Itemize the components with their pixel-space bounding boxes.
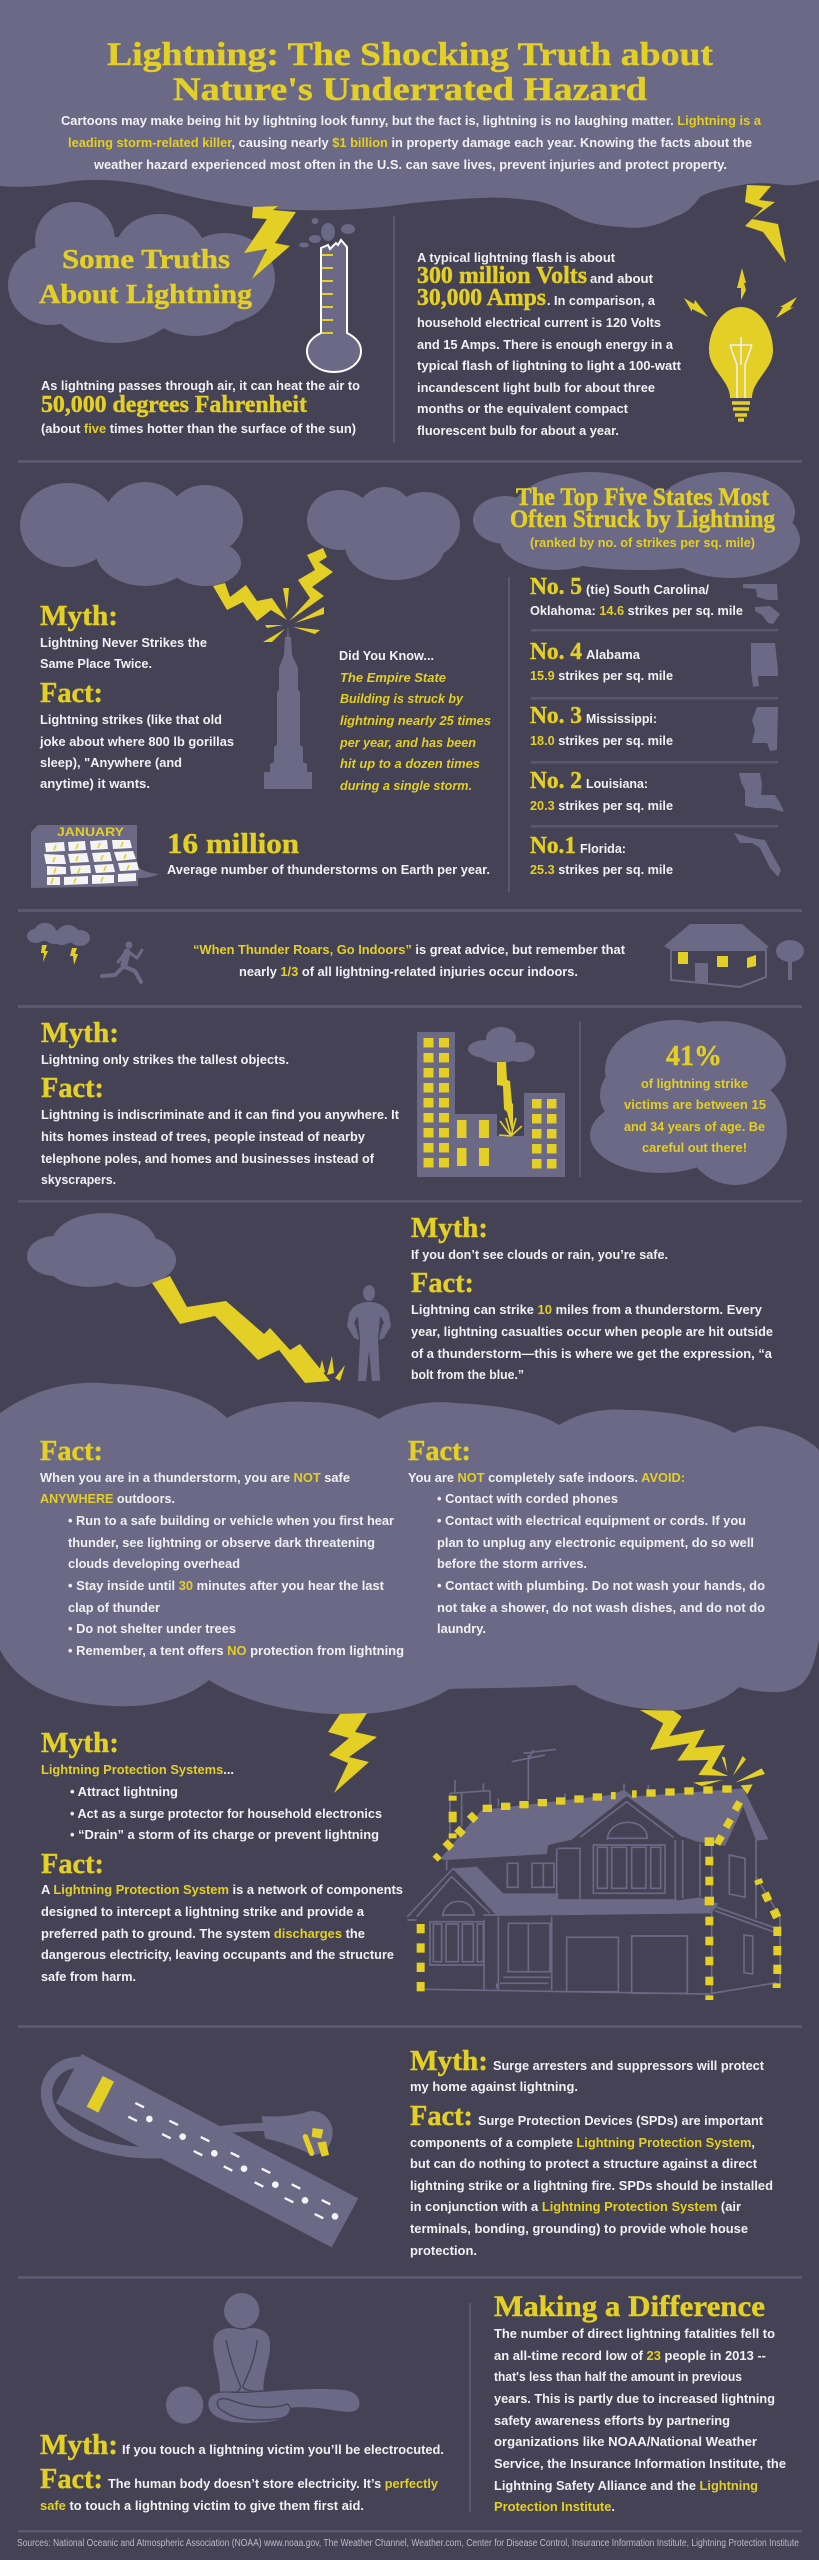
callout: 41 percent: 41%	[666, 1040, 722, 1072]
text: myth and fact: Myth:	[41, 1017, 119, 1049]
text: heat of lightning	[41, 379, 360, 436]
text: myth and fact: dangerous electricity, leaving occupants and the structure	[41, 1948, 394, 1962]
text: volts and amps: . In comparison, a	[547, 294, 656, 308]
heading: some truths: About Lightning	[39, 279, 253, 309]
text: myth and fact	[410, 2045, 773, 2258]
text: myth and fact	[411, 1212, 773, 1382]
rank: no. 3 mississippi	[530, 703, 778, 751]
panel: surge protection myth	[47, 2045, 773, 2258]
text: volts and amps: months or the equivalent compact	[417, 402, 629, 416]
text: myth and fact: of a thunderstorm—this is where we get the expression, “a	[411, 1347, 773, 1361]
panel: making a difference	[494, 2290, 786, 2514]
text: did you know: per year, and has been	[339, 736, 476, 750]
text: indoors fact	[408, 1435, 765, 1636]
text: myth and fact: but can do nothing to protect a structure against a direct	[410, 2157, 758, 2171]
text: myth and fact: year, lightning casualties occur when people are hit outside	[411, 1325, 773, 1339]
text: myth and fact: components of a complete Lightning Protection System ,	[410, 2136, 755, 2150]
text: myth and fact: hits homes instead of trees, people instead of nearby	[41, 1130, 365, 1144]
text: did you know	[339, 649, 491, 793]
text: myth and fact: Lightning Never Strikes the	[40, 636, 207, 650]
text: volts and amps: incandescent light bulb for about three	[417, 381, 655, 395]
protection conductor	[417, 1784, 781, 2000]
text: myth and fact: Myth:	[410, 2045, 488, 2077]
text: making a difference body: organizations like NOAA/National Weather	[494, 2435, 757, 2449]
text: when thunder roars go indoors	[193, 943, 626, 979]
panel: safety facts cloud	[0, 1383, 819, 1714]
rank: no. 3 mississippi: No. 3	[530, 703, 582, 729]
cloud: some truths	[8, 202, 275, 343]
text: myth and fact	[41, 1727, 403, 1984]
panel: when thunder roars	[27, 923, 804, 987]
text: myth and fact: designed to intercept a lightning strike and provide a	[41, 1905, 365, 1919]
text: myth and fact: safe from harm.	[41, 1970, 136, 1984]
rank: no. 4 alabama: No. 4	[530, 639, 582, 665]
rank: no. 1 florida	[530, 833, 781, 877]
text: volts and amps: A typical lightning flash is about	[417, 251, 616, 265]
text: myth and fact: Fact:	[40, 677, 103, 709]
text: myth and fact: Myth:	[41, 1727, 119, 1759]
text: did you know: lightning nearly 25 times	[340, 714, 491, 728]
rank: no. 3 mississippi: Mississippi:	[586, 712, 657, 726]
stat: 16 million thunderstorms	[167, 828, 490, 877]
cloud: storm middle	[307, 487, 460, 580]
text: making a difference body: safety awareness efforts by partnering	[494, 2414, 730, 2428]
icon: first aid figures	[166, 2293, 359, 2424]
rank: no. 2 louisiana: 20.3 strikes per sq. mile	[530, 799, 673, 813]
icon: house with lit windows	[664, 924, 804, 987]
icon: standing person	[347, 1285, 391, 1381]
icon: lightning strikes spire	[213, 548, 333, 642]
text: volts and amps: and 15 Amps. There is enough energy in a	[417, 338, 674, 352]
text: making a difference body: Protection Institute .	[494, 2500, 615, 2514]
text: indoors fact: You are NOT completely safe indoors. AVOID:	[408, 1471, 685, 1485]
icon: empire state building	[264, 625, 312, 789]
text: myth and fact: The human body doesn’t store electricity. It’s perfectly	[108, 2477, 438, 2491]
text: making a difference body: Service, the Insurance Information Institute, the	[494, 2457, 786, 2471]
house outline	[407, 1749, 780, 1994]
text: myth and fact: Same Place Twice.	[40, 657, 152, 671]
text: outdoors fact: thunder, see lightning or observe dark threatening	[68, 1536, 375, 1550]
text: myth and fact: • Attract lightning	[70, 1785, 178, 1799]
text: did you know: Building is struck by	[340, 692, 464, 706]
panel: myth never strikes twice	[20, 482, 491, 888]
text: making a difference body	[494, 2327, 786, 2514]
outlets	[128, 2103, 330, 2218]
callout: 41 percent: careful out there!	[642, 1141, 747, 1155]
text: heat of lightning: As lightning passes through air, it can heat the air to	[41, 379, 360, 393]
text: making a difference body: years. This is partly due to increased lightning	[494, 2392, 775, 2406]
intro text: leading storm-related killer , causing nearly $1 billion in property damage each year. Knowing the facts about the	[68, 136, 752, 150]
icon: small storm clouds	[27, 923, 90, 965]
text: myth and fact: Fact:	[40, 2463, 103, 2495]
text: myth and fact: joke about where 800 lb gorillas	[39, 735, 234, 749]
text: myth and fact: bolt from the blue.”	[411, 1368, 524, 1382]
text: outdoors fact: • Run to a safe building or vehicle when you first hear	[68, 1514, 394, 1528]
rank: no. 4 alabama: Alabama	[586, 648, 641, 662]
text: did you know: The Empire State	[340, 671, 446, 685]
text: making a difference body: The number of direct lightning fatalities fell to	[494, 2327, 775, 2341]
title: Nature's Underrated Hazard	[173, 72, 647, 108]
text: myth and fact	[41, 1017, 400, 1187]
text: myth and fact: Fact:	[411, 1267, 474, 1299]
text: volts and amps: and about	[590, 272, 654, 286]
rank: no. 2 louisiana	[530, 768, 784, 813]
panel: lightning protection systems	[41, 1710, 781, 2000]
icon: runner	[102, 942, 142, 982]
text: myth and fact: terminals, bonding, grounding) to provide whole house	[410, 2222, 748, 2236]
intro text	[61, 114, 762, 172]
text: volts and amps: household electrical current is 120 Volts	[417, 316, 661, 330]
heading: top five states: (ranked by no. of strikes per sq. mile)	[530, 536, 755, 550]
heading: making a difference: Making a Difference	[494, 2290, 765, 2323]
text: when thunder roars go indoors: “When Thunder Roars, Go Indoors” is great advice, but remember that	[193, 943, 626, 957]
cloud: distant storm	[27, 1213, 176, 1287]
intro text: Cartoons may make being hit by lightning look funny, but the fact is, lightning is no laughing matter. Lightning is a	[61, 114, 762, 128]
text: myth and fact: telephone poles, and homes and businesses instead of	[41, 1152, 375, 1166]
text: myth and fact: my home against lightning.	[410, 2080, 578, 2094]
text: making a difference body: an all-time record low of 23 people in 2013 --	[494, 2349, 766, 2363]
callout: 41 percent: and 34 years of age. Be	[624, 1120, 765, 1134]
text: did you know: Did You Know...	[339, 649, 434, 663]
text: myth and fact: Fact:	[41, 1072, 104, 1104]
text: myth and fact: • Act as a surge protector for household electronics	[70, 1807, 382, 1821]
icon: bolt from the blue	[152, 1276, 345, 1383]
rank: no. 5 south carolina and oklahoma	[530, 574, 780, 624]
text: making a difference body: that's less than half the amount in previous	[494, 2370, 742, 2384]
rank: no. 5 south carolina and oklahoma: Oklahoma: 14.6 strikes per sq. mile	[530, 604, 743, 618]
heading: some truths	[39, 244, 253, 309]
rank: no. 1 florida: Florida:	[580, 842, 626, 856]
text: myth and fact: If you don’t see clouds or rain, you’re safe.	[411, 1248, 668, 1262]
rank: no. 1 florida: No.1	[530, 833, 576, 859]
text: myth and fact	[39, 600, 234, 791]
rank: no. 5 south carolina and oklahoma: (tie) South Carolina/	[586, 583, 710, 597]
text: indoors fact: • Contact with electrical equipment or cords. If you	[437, 1514, 746, 1528]
text: indoors fact: plan to unplug any electronic equipment, do so well	[437, 1536, 754, 1550]
text: myth and fact: If you touch a lightning victim you’ll be electrocuted.	[122, 2443, 444, 2457]
panel: header cloud	[0, 0, 819, 228]
heading: top five states: Often Struck by Lightning	[510, 506, 775, 533]
text: myth and fact: A Lightning Protection System is a network of components	[41, 1883, 403, 1897]
text: outdoors fact: When you are in a thunderstorm, you are NOT safe	[40, 1471, 350, 1485]
lightning strike on roof	[640, 1710, 765, 1786]
title	[107, 37, 713, 108]
text: myth and fact: Myth:	[40, 600, 118, 632]
title: Lightning: The Shocking Truth about	[107, 37, 713, 73]
icon: city buildings struck by lightning	[417, 1027, 565, 1177]
text: indoors fact: • Contact with corded phones	[437, 1492, 618, 1506]
text: myth and fact: Fact:	[41, 1848, 104, 1880]
text: myth and fact	[40, 2429, 444, 2513]
text: outdoors fact: • Remember, a tent offers NO protection from lightning	[68, 1644, 404, 1658]
panel: touching a victim myth	[40, 2293, 444, 2513]
text: myth and fact: Lightning strikes (like that old	[40, 713, 222, 727]
panel: top five states	[473, 472, 800, 892]
text: indoors fact: laundry.	[437, 1622, 486, 1636]
text: myth and fact: • “Drain” a storm of its charge or prevent lightning	[70, 1828, 379, 1842]
text: outdoors fact: clouds developing overhead	[68, 1557, 240, 1571]
text: myth and fact: Myth:	[40, 2429, 118, 2461]
icon: power strip	[47, 2054, 358, 2247]
panel: some truths about lightning	[8, 185, 797, 443]
text: did you know: hit up to a dozen times	[340, 757, 480, 771]
text: myth and fact: skyscrapers.	[41, 1173, 116, 1187]
text: myth and fact: Surge arresters and suppressors will protect	[493, 2059, 765, 2073]
text: volts and amps: 30,000 Amps	[417, 285, 546, 311]
text: indoors fact: before the storm arrives.	[437, 1557, 587, 1571]
text: heat of lightning: (about five times hotter than the surface of the sun)	[41, 422, 356, 436]
text: volts and amps	[417, 251, 682, 438]
cloud: header background	[0, 0, 819, 228]
cloud: top five states	[473, 472, 800, 578]
text: volts and amps: fluorescent bulb for about a year.	[417, 424, 619, 438]
callout: 41 percent: of lightning strike	[641, 1077, 748, 1091]
text: did you know: during a single storm.	[340, 779, 472, 793]
text: outdoors fact: Fact:	[40, 1435, 103, 1467]
text: myth and fact: Lightning is indiscriminate and it can find you anywhere. It	[41, 1108, 400, 1122]
callout: 41 percent	[590, 1020, 787, 1185]
panel: tallest objects myth	[41, 1017, 787, 1187]
text: myth and fact: Surge Protection Devices (SPDs) are important	[478, 2114, 764, 2128]
text: outdoors fact	[40, 1435, 404, 1658]
roof	[440, 1788, 768, 1916]
heading: top five states	[510, 484, 775, 550]
rank: no. 5 south carolina and oklahoma: No. 5	[530, 574, 582, 600]
text: myth and fact: preferred path to ground. The system discharges the	[41, 1927, 365, 1941]
text: myth and fact: Myth:	[411, 1212, 488, 1244]
text: making a difference body: Lightning Safety Alliance and the Lightning	[494, 2479, 758, 2493]
text: myth and fact: Lightning only strikes the tallest objects.	[41, 1053, 289, 1067]
rank: no. 1 florida: 25.3 strikes per sq. mile	[530, 863, 673, 877]
text: myth and fact: Lightning Protection Systems ...	[41, 1763, 234, 1777]
text: indoors fact: • Contact with plumbing. Do not wash your hands, do	[437, 1579, 765, 1593]
icon: lightning bolt	[244, 206, 296, 279]
icon: lightning bolt	[328, 1713, 377, 1793]
intro text: weather hazard experienced most often in the U.S. can save lives, prevent injuries and protect property.	[93, 158, 727, 172]
text: indoors fact: Fact:	[408, 1435, 471, 1467]
text: myth and fact: Lightning can strike 10 miles from a thunderstorm. Every	[411, 1303, 762, 1317]
icon: thermometer	[299, 218, 361, 372]
rank: no. 2 louisiana: Louisiana:	[586, 777, 648, 791]
text: when thunder roars go indoors: nearly 1/3 of all lightning-related injuries occur indoors.	[239, 965, 578, 979]
icon: light bulb	[684, 268, 797, 420]
cloud: 41 percent	[590, 1020, 787, 1185]
rank: no. 2 louisiana: No. 2	[530, 768, 582, 794]
text: indoors fact: not take a shower, do not wash dishes, and do not do	[437, 1601, 765, 1615]
text: outdoors fact: • Do not shelter under trees	[68, 1622, 236, 1636]
text: myth and fact: safe to touch a lightning victim to give them first aid.	[40, 2499, 364, 2513]
heading: some truths: Some Truths	[62, 244, 230, 274]
cloud: safety background	[0, 1383, 819, 1714]
rank: no. 4 alabama	[530, 639, 778, 687]
stat: 16 million thunderstorms: 16 million	[167, 828, 299, 860]
icon: calendar	[31, 825, 159, 888]
text: volts and amps: 300 million Volts	[417, 263, 587, 289]
rank: no. 4 alabama: 15.9 strikes per sq. mile	[530, 669, 673, 683]
cloud: storm left	[20, 482, 243, 586]
text: myth and fact: in conjunction with a Lightning Protection System (air	[410, 2200, 741, 2214]
text: myth and fact: Fact:	[410, 2100, 473, 2132]
text: heat of lightning: 50,000 degrees Fahrenheit	[41, 392, 307, 418]
text: volts and amps: typical flash of lightning to light a 100-watt	[417, 359, 682, 373]
text: myth and fact: sleep), "Anywhere (and	[40, 756, 182, 770]
text: myth and fact: protection.	[410, 2244, 477, 2258]
text: outdoors fact: • Stay inside until 30 minutes after you hear the last	[68, 1579, 385, 1593]
stat: 16 million thunderstorms: Average number of thunderstorms on Earth per year.	[167, 863, 490, 877]
rank: no. 3 mississippi: 18.0 strikes per sq. mile	[530, 734, 673, 748]
icon: calendar: JANUARY	[57, 825, 124, 839]
callout: 41 percent: victims are between 15	[624, 1098, 766, 1112]
icon: lightning bolt top right	[745, 185, 786, 263]
text: outdoors fact: clap of thunder	[68, 1601, 160, 1615]
panel: clouds or rain myth	[27, 1212, 773, 1383]
text: myth and fact: lightning strike or a lightning fire. SPDs should be installed	[410, 2179, 773, 2193]
heading: top five states: The Top Five States Most	[516, 484, 770, 511]
text: myth and fact: anytime) it wants.	[40, 777, 150, 791]
icon: house with protection system	[407, 1710, 781, 2000]
text: outdoors fact: ANYWHERE outdoors.	[40, 1492, 175, 1506]
